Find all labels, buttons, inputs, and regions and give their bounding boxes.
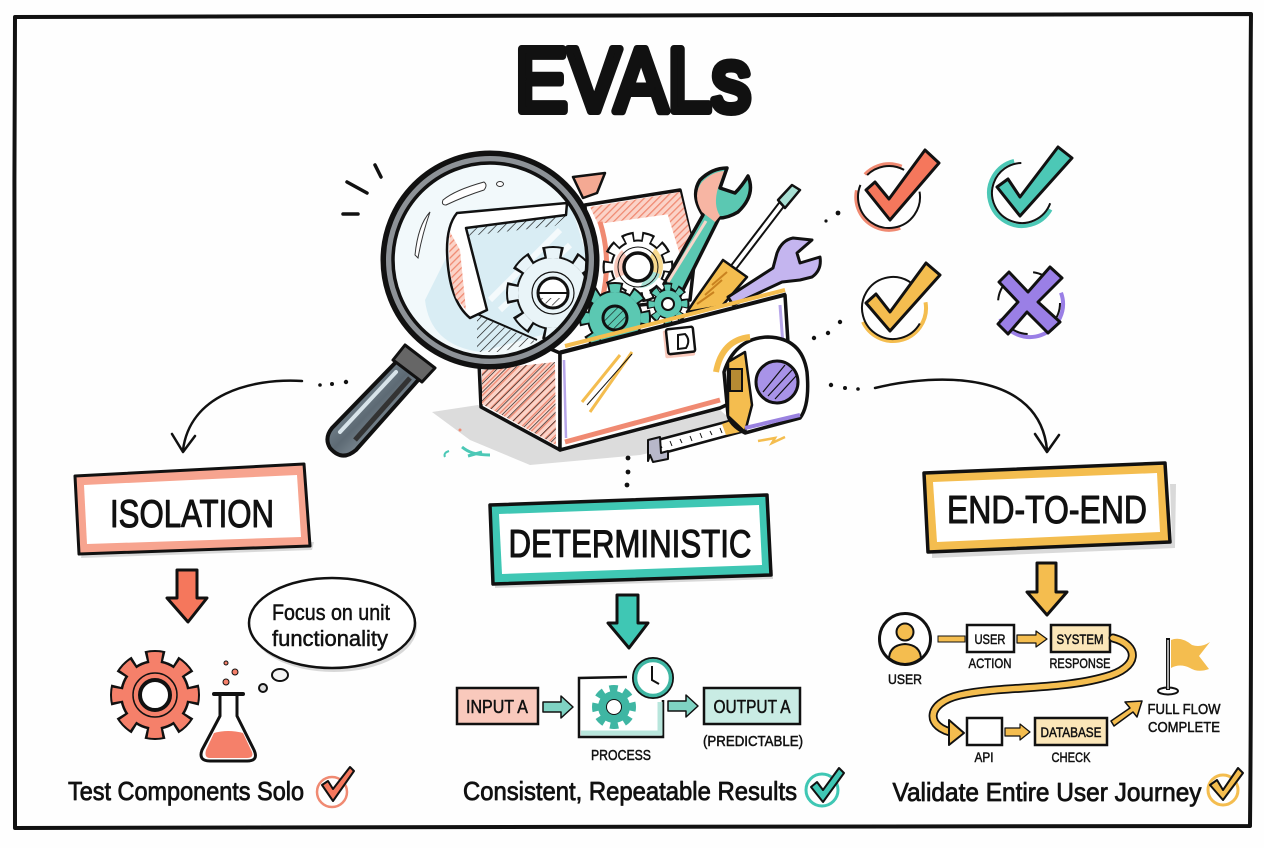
- box gears: [584, 237, 668, 349]
- teal gear: [584, 287, 646, 349]
- heading: isolation: ISOLATION: [110, 493, 274, 536]
- open lid: [585, 190, 695, 310]
- lens contents: [393, 163, 594, 357]
- process box: [579, 658, 673, 737]
- curved arrow to end-to-end: [875, 380, 1059, 452]
- label: response: RESPONSE: [1050, 655, 1110, 671]
- icon: flag: [1158, 638, 1210, 694]
- curved arrow to isolation: [172, 381, 302, 452]
- coral and teal wrench: [664, 168, 750, 296]
- winding arrow: [933, 638, 1132, 745]
- purple wrench: [728, 238, 820, 305]
- input box: [457, 688, 538, 724]
- icon: teal gear: [596, 689, 632, 725]
- arrow: process to output: [668, 695, 698, 717]
- thought bubble: functionality: [272, 626, 388, 651]
- connector dots: [318, 211, 860, 487]
- icon: small coral check: [317, 767, 354, 807]
- input box: INPUT A: [466, 697, 528, 717]
- checkmark: yellow: [851, 263, 940, 350]
- caption: end-to-end: Validate Entire User Journey: [892, 777, 1202, 807]
- output box: [704, 688, 800, 724]
- checkmark: coral: [847, 150, 939, 239]
- lens highlights: [415, 182, 486, 258]
- heading: deterministic: DETERMINISTIC: [508, 523, 752, 566]
- heading: isolation: [75, 464, 314, 558]
- toolbox illustration: [432, 168, 820, 465]
- output box: OUTPUT A: [714, 697, 790, 717]
- box: database: DATABASE: [1040, 724, 1102, 740]
- icon: flask: [201, 661, 255, 761]
- icon: user: [880, 614, 930, 664]
- heading: deterministic: [490, 495, 773, 588]
- label: user: USER: [888, 671, 922, 687]
- small teal gear: [650, 286, 686, 322]
- icon: small yellow check: [1208, 768, 1243, 805]
- paint splatter: [444, 428, 785, 457]
- screwdriver: [687, 185, 800, 312]
- spark lines: [343, 165, 381, 214]
- label: full flow complete: COMPLETE: [1148, 719, 1220, 736]
- arrow: isolation down: [167, 570, 207, 622]
- tape measure: [648, 337, 808, 462]
- box: database: [1035, 718, 1107, 745]
- magnified gear: [512, 252, 594, 334]
- ground shadow: [432, 405, 745, 465]
- x mark: purple: [988, 262, 1072, 346]
- lens: [386, 156, 594, 364]
- magnifying glass: [327, 153, 597, 456]
- panel: isolation: [68, 464, 417, 807]
- checkmark: teal: [977, 147, 1072, 238]
- box: api: [967, 718, 1002, 745]
- arrow: end-to-end down: [1027, 563, 1067, 615]
- title: EVALs: [515, 31, 751, 131]
- caption: isolation: Test Components Solo: [68, 776, 304, 806]
- label: action: ACTION: [968, 655, 1012, 671]
- metal rim: [389, 159, 591, 361]
- orange gear: [608, 237, 668, 297]
- latch: [663, 327, 695, 358]
- box: system: [1051, 625, 1110, 652]
- arrow: action to response: [1017, 631, 1047, 647]
- label: full flow complete: [1148, 701, 1221, 736]
- icon: coral gear: [116, 656, 194, 734]
- panel: end-to-end: [880, 463, 1243, 807]
- arrow: api to database: [1005, 724, 1030, 740]
- box front: [560, 290, 790, 450]
- box: user action: [967, 625, 1014, 652]
- caption: deterministic: Consistent, Repeatable Results: [463, 776, 797, 806]
- label: process: PROCESS: [591, 747, 651, 764]
- connector line: [938, 636, 965, 642]
- icon: clock: [633, 658, 673, 698]
- lid tab: [573, 173, 605, 198]
- heading: end-to-end: END-TO-END: [947, 489, 1147, 532]
- panel: deterministic: [457, 495, 844, 806]
- arrow: input to process: [543, 696, 573, 718]
- box: system: SYSTEM: [1056, 631, 1104, 647]
- arrow: deterministic down: [608, 595, 648, 648]
- label: check: CHECK: [1052, 749, 1091, 765]
- heading: end-to-end: [924, 463, 1176, 558]
- label: full flow complete: FULL FLOW: [1148, 701, 1221, 718]
- icon: small teal check: [806, 768, 844, 806]
- thought bubble: [249, 578, 417, 692]
- box left side: [477, 318, 560, 450]
- thought bubble: Focus on unit: [272, 600, 390, 625]
- box: user action: USER: [974, 631, 1006, 647]
- arrow: database to flag: [1111, 701, 1142, 726]
- label: predictable: (PREDICTABLE): [703, 733, 803, 750]
- handle: [327, 345, 435, 456]
- label: api: API: [974, 749, 994, 765]
- tape blade: [648, 419, 741, 462]
- magnified lid: [447, 203, 570, 352]
